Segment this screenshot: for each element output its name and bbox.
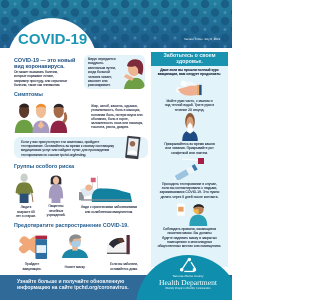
risk text: chronic conditions: Люди с хроническими заболеваниями — [81, 205, 137, 209]
text: get tested — [160, 182, 220, 199]
text: cover cough: или чихания. Прикрывайте рот — [165, 146, 214, 150]
footer band — [0, 275, 232, 300]
panel: take care of your health — [151, 52, 228, 267]
text: cover cough: Прикрывайтесь во время кашля — [164, 142, 215, 146]
intro heading: COVID-19 — это новый — [14, 58, 75, 64]
callout: testing — [14, 137, 148, 158]
risk text: chronic conditions — [80, 205, 137, 214]
prevention text: vaccinate: вакцинацию. — [23, 267, 41, 271]
risk text: older people: возрасте 65 — [17, 210, 35, 214]
heading: prevent spread: Предотвратите распространение COVID-19. — [14, 222, 129, 228]
text: follow mask rules: Соблюдать правила, касающиеся — [163, 227, 216, 231]
footer text — [17, 278, 129, 291]
text: wash hands: под теплой водой. Трите руки в — [165, 103, 214, 107]
prevention text: mask: Носите маску. — [65, 265, 85, 269]
risk text: older people — [16, 205, 36, 218]
risk text: care facility — [46, 204, 66, 217]
panel: virus spread — [84, 55, 145, 89]
panel intro text: Даже если вы прошли полный курс — [160, 68, 219, 72]
prevention text: stay home: Если вы заболели, — [110, 262, 138, 266]
text: wash hands: Мойте руки часто, с мылом и — [167, 99, 212, 103]
department name: Healthy People in Healthy Communities — [165, 287, 211, 290]
footer text: Узнайте больше и получайте обновленную — [17, 278, 124, 284]
icon: vaccine — [18, 236, 48, 259]
text: follow mask rules: помещениях и многолюдных — [167, 240, 212, 244]
department name: Health Department — [159, 278, 217, 286]
icon: sneezing person — [124, 59, 145, 89]
panel heading: Заботьтесь о своем — [163, 53, 216, 59]
text: follow mask rules: будете надевать маску в закрытых — [162, 236, 217, 240]
symptoms text: Жар, озноб, кашель, одышка, — [91, 104, 138, 108]
icon: patient in hospital bed — [79, 176, 132, 202]
spread text: воздушно- — [88, 61, 104, 65]
title: COVID-19 — [18, 31, 87, 48]
spread text: кашляет или — [88, 79, 107, 83]
text: get tested: если вы контактировали с людьми, — [162, 186, 217, 190]
panel intro text — [158, 68, 221, 76]
spread text: капельным путем, — [88, 66, 116, 70]
testing text — [21, 140, 114, 157]
logo mark — [180, 258, 196, 272]
text: wash hands — [164, 99, 214, 112]
department name: Tacoma–Pierce County — [172, 274, 204, 278]
panel heading — [151, 52, 228, 66]
text: get tested: заразившимися COVID-19. Это нужно — [160, 190, 219, 194]
text: get tested: делать через 5 дней после контакта. — [161, 195, 218, 199]
text: cover cough — [164, 142, 215, 155]
panel intro text: вакцинации, вам следует продолжать: — [158, 72, 221, 76]
icon: three people with symptoms — [14, 104, 68, 133]
symptoms text: обоняния, боль в горле, — [91, 117, 129, 121]
intro text: болезни, такие как пневмония. — [14, 83, 60, 87]
symptoms text: тошнота, рвота, диарея. — [91, 125, 129, 129]
prevention text: vaccinate — [22, 262, 42, 271]
spread text: разговаривает. — [88, 83, 111, 87]
text: get tested: Проходить тестирование в случае, — [162, 182, 217, 186]
icon: person in mask with document — [177, 204, 208, 226]
panel heading: здоровье. — [176, 59, 203, 65]
text: cover cough: салфеткой или локтем. — [171, 151, 208, 155]
spread text: человек чихает, — [88, 75, 112, 79]
risk text: older people: Люди в — [21, 205, 31, 209]
icon: person with mask — [62, 234, 88, 258]
prevention text: stay home — [110, 262, 138, 271]
issue date: Version 4 Rev. July 8, 2021 — [184, 37, 220, 41]
spread text: Вирус передается — [88, 57, 116, 61]
spread text — [88, 57, 116, 87]
icon: washing hands — [176, 80, 202, 96]
intro heading — [14, 58, 75, 70]
risk text: older people: лет и старше. — [16, 214, 36, 218]
text: follow mask rules: ношения масок. Вы должны — [167, 231, 212, 235]
testing text: медицинских услуг или найдите пункт для прохождения — [21, 148, 109, 152]
department name — [159, 274, 217, 290]
symptoms text: головная боль, потеря вкуса или — [91, 112, 143, 116]
symptoms text: утомляемость, боль в мышцах, — [91, 108, 140, 112]
intro text — [14, 70, 68, 87]
text: wash hands: течение 20 секунд. — [175, 108, 204, 112]
intro heading: вид коронавируса. — [14, 64, 65, 70]
symptoms text: заложенность носа или насморк, — [91, 121, 143, 125]
risk text: care facility: лечебных — [49, 208, 63, 212]
icon: phone with doctor — [125, 136, 140, 160]
heading: symptoms: Симптомы — [14, 92, 43, 98]
prevention text: stay home: оставайтесь дома. — [110, 267, 138, 271]
white title circle — [10, 18, 94, 48]
risk text: chronic conditions: или ослабленным иммунитетом. — [85, 210, 133, 214]
department logo circle — [136, 255, 232, 300]
text: follow mask rules — [158, 227, 222, 248]
risk text: care facility: Пациенты — [49, 204, 63, 208]
icon: sick person in bed — [107, 235, 130, 254]
symptoms text — [91, 104, 143, 129]
heading: risk groups: Группы особого риска — [14, 164, 74, 170]
text: follow mask rules: общественных местах или помещениях. — [158, 244, 221, 248]
testing text: Если у вас присутствуют эти симптомы, пройдите — [21, 140, 99, 144]
intro text: Он может вызывать болезни, — [14, 70, 58, 74]
testing text: тестирования по ссылке tpchd.org/testing. — [21, 153, 86, 157]
icon: cover cough — [182, 113, 198, 141]
icon: test tube — [174, 158, 204, 180]
icon: care home resident — [48, 176, 64, 203]
intro text: например простуду, или серьезные — [14, 79, 67, 83]
prevention text: vaccinate: Пройдите — [25, 262, 39, 266]
intro text: которые поражают легкие, — [14, 74, 54, 78]
icon: elderly man — [16, 174, 34, 203]
testing text: тестирование. Оставайтесь во время к своему поставщику — [21, 144, 114, 148]
header banner — [0, 0, 232, 48]
risk text: care facility: учреждений. — [47, 213, 65, 217]
spread text: когда больной — [88, 70, 110, 74]
footer text: информацию на сайте tpchd.org/coronavirus. — [17, 285, 129, 291]
